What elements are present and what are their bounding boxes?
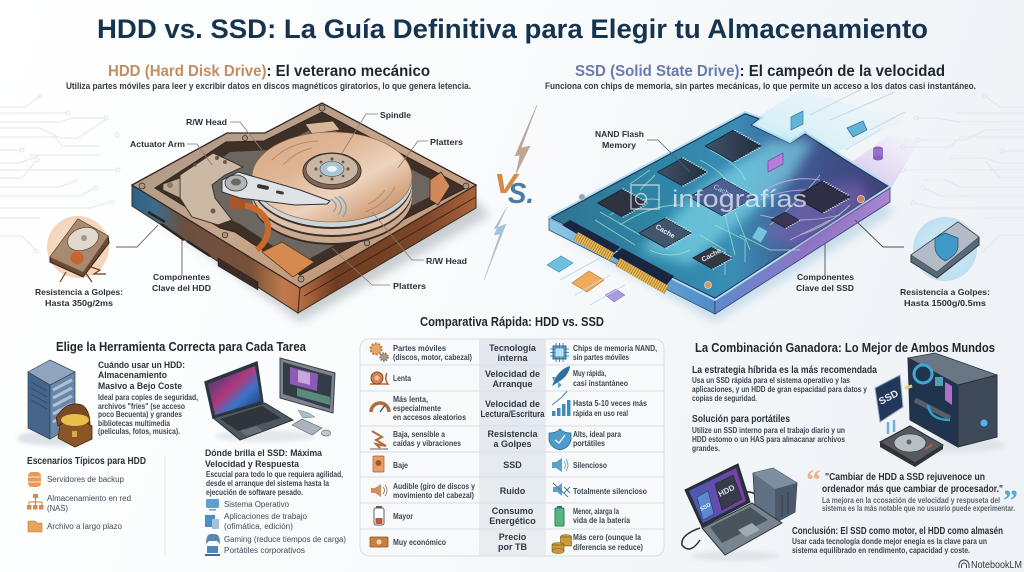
row: ruido: Totalmente silencioso: [573, 487, 647, 496]
icon: shield: [549, 429, 571, 450]
item: Aplicaciones: (ofimática, edición): [224, 522, 293, 531]
icon: HDD shock resistance: [47, 216, 158, 282]
label NAND: [595, 129, 690, 172]
row: tecnologia: sin partes móviles: [573, 353, 629, 362]
row: tecnologia: Partes móviles: [393, 344, 447, 353]
heading: Elige la Herramienta Correcta para Cada Tarea: [56, 339, 307, 354]
row: tecnologia: Tecnología: [489, 343, 537, 353]
icon: banknote: [370, 537, 388, 547]
row: golpes: portátiles: [573, 439, 605, 448]
row: precio: Precio: [499, 532, 527, 542]
icon: laptop and monitor: [205, 358, 335, 442]
text: conclusion: sistema equilibrado en rendimento, capacidad y coste.: [792, 546, 970, 555]
text: conclusion: [792, 526, 1003, 555]
text: SSD description: Funciona con chips de memoria, sin partes mecánicas, lo que permite un acceso a los datos casi instantáneo.: [545, 81, 976, 91]
label Platters lower: Platters: [393, 281, 426, 291]
row: lectura: Hasta 5-10 veces más: [573, 399, 647, 408]
text: where SSD shines: [205, 448, 343, 497]
data stream top: [700, 90, 905, 210]
icon: low battery: [374, 506, 384, 525]
list: HDD scenarios: [27, 456, 146, 532]
text: when to use HDD: (peliculas, fotos, musica).: [98, 427, 180, 436]
row: SSD: Baje: [393, 461, 408, 470]
row: golpes: Alts, ídeal para: [573, 430, 621, 439]
feature column: [479, 340, 546, 556]
actuator plate: [180, 153, 243, 225]
text: laptop solution: grandes.: [692, 444, 720, 453]
icon: laptop with NAS: HDD: [717, 483, 737, 499]
row: ruido: movimiento del cabezal): [393, 491, 474, 500]
VS badge with lightning: S.: [508, 178, 534, 210]
row: arranque: Lenta: [393, 374, 411, 383]
row: tecnologia: [370, 343, 657, 363]
icon: rocket: [552, 366, 570, 388]
label Componentes HDD: Clave del HDD: [152, 283, 211, 293]
text: where SSD shines: Velocidad y Respuesta: [205, 459, 300, 470]
row: consumo: vida de la batería: [573, 516, 630, 525]
label Spindle: Spindle: [380, 110, 411, 120]
text: conclusion: Usar cada tecnología donde mejor enegia es la clave para un: [792, 537, 987, 546]
quote: ”: [1003, 484, 1018, 517]
row: consumo: Menor, alarga la: [573, 507, 619, 516]
row: consumo: [374, 506, 630, 526]
icon: laptop with NAS: SSD: [699, 502, 712, 513]
VS badge with lightning: V: [494, 168, 520, 199]
item: Portátiles: Portátiles corporativos: [224, 546, 305, 555]
screws: [139, 105, 469, 282]
label Platters lower: [332, 248, 426, 291]
label Actuator Arm: [130, 139, 212, 165]
label Componentes SSD: [796, 244, 854, 293]
row: precio: [370, 532, 643, 554]
watermark: infografías: [672, 186, 807, 213]
row: ruido: Audible (giro de discos y: [393, 482, 475, 491]
row: arranque: casi instantáneo: [573, 379, 628, 388]
heading: Comparativa Rápida: HDD vs. SSD: [420, 314, 604, 329]
row: precio: Muy económico: [393, 538, 446, 547]
icon: gears: [370, 344, 388, 361]
text: when to use HDD: Ideal para copies de seguridad,: [98, 393, 198, 402]
text: when to use HDD: [98, 360, 198, 436]
row: tecnologia: (discos, motor, cabezal): [393, 353, 472, 362]
item: backup: Servidores de backup: [47, 475, 125, 484]
illustration: SSD: [547, 90, 920, 322]
text: hybrid strategy: Usa un SSD rápida para el sistema operativo y las: [692, 376, 850, 385]
icon: laptop with NAS: [682, 464, 797, 561]
label: HDD shock: Hasta 350g/2ms: [45, 298, 113, 308]
icon: gauge: [371, 403, 389, 412]
VS badge with lightning: [484, 105, 537, 280]
icon: coins: [552, 534, 572, 554]
icon: snail: [370, 372, 388, 384]
top platter: [252, 132, 412, 222]
label Componentes HDD: Componentes: [153, 272, 210, 282]
text: hybrid strategy: [692, 365, 877, 403]
text: HDD description: Utiliza partes móviles para leer y excribir datos en discos magnéticos giratorios, lo que genera letencia.: [66, 81, 471, 91]
row: ruido: [371, 482, 647, 500]
icon: falling drive: [370, 431, 388, 449]
flying icons: [547, 111, 883, 302]
row: SSD: [373, 456, 607, 472]
ribbon: [235, 203, 268, 250]
row: ruido: Ruido: [500, 486, 526, 496]
item: Aplicaciones: Aplicaciones de trabajo: [224, 512, 308, 521]
item: Sistema Operativo: Sistema Operativo: [224, 500, 290, 509]
row: golpes: caídas y vibraciones: [393, 439, 461, 448]
row: golpes: Baja, sensible a: [393, 430, 445, 439]
panel: winning combination: [682, 340, 1018, 561]
quote: “: [806, 464, 821, 497]
panel: comparison table: [360, 314, 664, 556]
icon: chip: [550, 343, 569, 362]
glow: [640, 140, 815, 265]
row: consumo: Consumo: [492, 506, 534, 516]
label: HDD shock: Resistencia a Golpes:: [35, 287, 123, 297]
text: hybrid strategy: La estrategia híbrida es la más recomendada: [692, 365, 877, 376]
text: where SSD shines: desde el arranque del sistema hasta la: [206, 479, 329, 488]
item: NAS: (NAS): [47, 504, 68, 513]
row: golpes: Resistencia: [487, 429, 539, 439]
label: SSD shock: Hasta 1500g/0.5ms: [904, 298, 986, 308]
label Componentes SSD: Componentes: [797, 272, 854, 282]
text: when to use HDD: Masivo a Bejo Coste: [98, 381, 182, 392]
row: arranque: Arranque: [492, 379, 533, 389]
row: precio: Más cero (ounque la: [573, 533, 641, 542]
icon: speaker: [552, 458, 568, 472]
item: Aplicaciones: [205, 512, 308, 531]
row: arranque: Muy rápida,: [573, 369, 606, 378]
read waves: [331, 196, 346, 217]
spindle: [303, 153, 361, 189]
text: when to use HDD: archivos "fríes" (se acceso: [98, 402, 185, 411]
row: golpes: [370, 429, 621, 450]
label NAND: NAND Flash: [595, 129, 644, 139]
item: Sistema Operativo: [206, 499, 290, 510]
row: precio: por TB: [498, 542, 527, 552]
label Componentes SSD: Clave del SSD: [796, 283, 854, 293]
item: Gaming: Gaming (reduce tiempos de carga): [224, 535, 346, 544]
row: lectura: rápida en uso real: [573, 409, 628, 418]
panel: choose the right tool: [17, 339, 346, 556]
icon: desktop tower with SSD and HDD: [875, 353, 1005, 467]
heading: HDD: HDD (Hard Disk Drive): El veterano mecánico: [108, 63, 430, 80]
connector pins: [562, 220, 674, 294]
row: consumo: Mayor: [393, 512, 413, 521]
row: lectura: Velocidad de: [485, 399, 540, 409]
text: hybrid strategy: copias de seguridad.: [692, 394, 757, 403]
icon: server and treasure chest: [17, 360, 93, 447]
arm: [222, 172, 330, 205]
text: when to use HDD: Cuándo usar un HDD:: [98, 360, 185, 371]
list: SSD uses: [205, 499, 346, 556]
quote: [806, 464, 1018, 517]
heading: Escenarios Típicos para HDD: [27, 456, 146, 467]
label Actuator Arm: Actuator Arm: [130, 139, 185, 149]
label R/W Head: [186, 117, 262, 150]
text: laptop solution: HDD estomo o un HAS para almacanar archivos: [692, 435, 845, 444]
quote: "Cambiar de HDD a SSD rejuvenoce un: [825, 471, 985, 483]
text: when to use HDD: poco Becuenta) y grandes: [98, 410, 182, 419]
row: arranque: [370, 366, 628, 389]
label R/W Head: R/W Head: [186, 117, 227, 127]
title: HDD vs. SSD: La Guía Definitiva para Elegir tu Almacenamiento: [97, 14, 928, 44]
icon: muted speaker: [553, 483, 570, 497]
row: lectura: [371, 391, 647, 422]
icon: speaker: [371, 484, 387, 497]
chip cluster: Cache: [654, 224, 676, 240]
chip cluster: [598, 130, 852, 269]
label R/W Head lower: R/W Head: [426, 256, 467, 266]
icon: full battery: [555, 506, 564, 526]
label: SSD shock: [900, 287, 990, 308]
row: lectura: Lectura/Escritura: [480, 409, 545, 419]
icon: sad face card: [373, 456, 384, 472]
row: lectura: Más lenta,: [393, 395, 428, 404]
chip cluster: Cache: [712, 184, 733, 199]
label R/W Head lower: [372, 212, 467, 266]
platter stack: [252, 155, 412, 245]
row: tecnologia: interna: [497, 353, 528, 363]
traces: [595, 150, 850, 275]
table body: [360, 339, 664, 556]
row: SSD: Silencioso: [573, 461, 607, 470]
row: golpes: a Golpes: [493, 439, 532, 449]
label Platters top: Platters: [430, 137, 463, 147]
text: laptop solution: [692, 414, 845, 453]
connector slots: [148, 212, 210, 256]
row: lectura: especialmente: [393, 404, 441, 413]
text: where SSD shines: ejecución de software pesado.: [206, 488, 303, 497]
text: hybrid strategy: aplicaciones, y un HDD de gran espacidad para datos y: [692, 385, 867, 394]
row: precio: diferencia se reduce): [573, 543, 643, 552]
text: when to use HDD: Almacenamiento: [98, 370, 167, 381]
item: NAS: Almacenamiento en red: [47, 494, 131, 503]
icon: desktop tower with SSD and HDD: SSD: [877, 388, 901, 408]
illustration: HDD: [130, 103, 490, 322]
row: lectura: en accesos aleatorios: [393, 413, 466, 422]
text: when to use HDD: bibliotecas multimedia: [98, 419, 170, 428]
item: archive: Archivo a largo plazo: [47, 522, 123, 531]
right circuit decoration: [901, 94, 1024, 252]
label: HDD shock: [35, 287, 123, 308]
heading: SSD: SSD (Solid State Drive): El campeón de la velocidad: [575, 63, 945, 80]
label Platters top: [398, 137, 463, 168]
bracket right: [430, 172, 450, 205]
row: arranque: Velocidad de: [485, 369, 540, 379]
copper plate: [262, 242, 314, 277]
text: where SSD shines: Escucial para todo lo que requiera agilidad,: [206, 470, 343, 479]
label Spindle: [342, 110, 411, 153]
text: laptop solution: Utilize un SSD interno para el trabajo diario y un: [692, 426, 845, 435]
text: where SSD shines: Dónde brilla el SSD: Máxima: [205, 448, 323, 459]
row: tecnologia: Chips de memoria NAND,: [573, 344, 657, 353]
label: SSD shock: Resistencia a Golpes:: [900, 287, 990, 297]
text: laptop solution: Solución para portátiles: [692, 414, 790, 425]
item: NAS: [27, 494, 131, 513]
left circuit decoration: [0, 94, 120, 253]
row: consumo: Energético: [489, 516, 536, 526]
row: SSD: SSD: [503, 460, 522, 470]
label Componentes HDD: [152, 240, 211, 293]
label NAND: Memory: [602, 140, 636, 150]
chip cluster: Cache: [701, 248, 723, 264]
watermark: [631, 185, 807, 213]
icon: SSD shock resistance: [855, 217, 979, 281]
icon: growth bars: [552, 391, 570, 416]
